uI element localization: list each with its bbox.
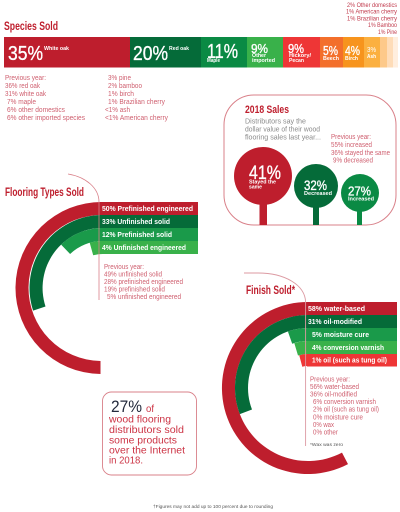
species previous year, column 2: <1% American cherry <box>105 115 168 122</box>
sales previous year: 55% increased <box>331 142 372 149</box>
species previous year, column 1: 6% other imported species <box>7 115 85 122</box>
species stacked bar: 9% <box>251 41 268 56</box>
species stacked bar: 5% <box>323 43 338 58</box>
chart: finish radial bars: 1% oil (such as tung oil) <box>312 358 387 364</box>
finish previous year <box>310 376 379 436</box>
chart: flooring types radial bars: 33% Unfinished solid <box>102 219 170 226</box>
flooring previous year <box>104 264 183 301</box>
lollipop: stayed the same 41%: Stayed the <box>249 180 276 186</box>
chart: finish radial bars: 5% moisture cure <box>312 332 369 339</box>
species previous year, column 1: 31% white oak <box>5 91 46 98</box>
chart: flooring types radial bars: 12% Prefinished solid <box>102 232 172 239</box>
footnote: rounding: †Figures may not add up to 100 percent due to rounding <box>153 504 273 510</box>
species stacked bar: 20% <box>133 43 168 65</box>
flooring previous year: 49% unfinished solid <box>104 272 162 278</box>
species stacked bar: White oak <box>44 46 70 52</box>
chart: finish radial bars: 4% conversion varnish <box>312 345 384 352</box>
lollipop: stayed the same 41%: same <box>249 184 262 190</box>
footnote: wax was zero: *Wax was zero <box>310 442 343 448</box>
heading: Species Sold: Species Sold <box>4 21 58 33</box>
flooring previous year: 5% unfinished engineered <box>107 294 181 301</box>
lollipop: decreased 32% <box>294 164 338 225</box>
sales intro text: dollar value of their wood <box>245 126 320 134</box>
sales intro text: Distributors say the <box>245 118 306 126</box>
callout: internet sales: over the Internet <box>109 444 185 456</box>
finish previous year: 0% moisture cure <box>313 414 363 422</box>
species stacked bar: 11% <box>207 41 238 63</box>
species previous year, column 2: 1% birch <box>108 91 134 98</box>
callout: internet sales <box>102 392 196 475</box>
chart: flooring types radial bars: 4% Unfinished engineered <box>102 245 186 252</box>
lollipop: decreased 32%: Decreased <box>304 191 332 197</box>
lollipop: increased 27%: Increased <box>348 196 374 202</box>
finish previous year: 0% wax <box>313 422 334 429</box>
species stacked bar <box>4 37 398 68</box>
species stacked bar: imported <box>252 58 275 64</box>
species previous year, column 2: 2% bamboo <box>108 83 142 90</box>
small species list, top right <box>346 2 398 36</box>
species stacked bar: Red oak <box>169 46 190 52</box>
flooring previous year: Previous year: <box>104 264 144 271</box>
sales previous year: Previous year: <box>331 134 371 141</box>
finish previous year: 56% water-based <box>310 384 359 391</box>
species previous year, column 1: 7% maple <box>7 99 36 106</box>
species stacked bar: Ash <box>367 54 376 60</box>
species stacked bar: 9% <box>288 41 304 56</box>
sales previous year: 9% decreased <box>333 158 373 164</box>
species stacked bar: 4% <box>345 43 360 58</box>
panel: 2018 Sales <box>224 95 396 225</box>
species stacked bar: Other <box>252 53 266 59</box>
lollipop: stayed the same 41%: 41% <box>249 163 281 184</box>
flooring previous year: 28% prefinished engineered <box>104 279 183 286</box>
species stacked bar: Hickory/ <box>289 53 312 59</box>
sales intro text <box>245 118 321 142</box>
species previous year, column 1: 6% other domestics <box>7 107 65 114</box>
lollipop: increased 27%: 27% <box>348 184 371 198</box>
chart: flooring types radial bars <box>15 174 198 374</box>
sales previous year: 36% stayed the same <box>331 150 390 157</box>
species previous year, column 2: <1% ash <box>105 107 130 114</box>
chart: finish radial bars <box>222 273 397 474</box>
species previous year, column 2: 1% Brazilian cherry <box>108 99 165 106</box>
callout: internet sales: wood flooring <box>108 414 171 426</box>
species stacked bar: Birch <box>345 56 358 62</box>
species previous year, column 1: Previous year: <box>5 75 46 82</box>
species stacked bar: Maple <box>207 58 220 64</box>
chart: finish radial bars: 58% water-based <box>308 306 365 313</box>
lollipop: decreased 32%: 32% <box>304 177 327 193</box>
chart: flooring types radial bars: 50% Prefinished engineered <box>102 206 193 213</box>
callout: internet sales: distributors sold <box>109 424 184 436</box>
species stacked bar: Beech <box>323 56 339 62</box>
callout: internet sales: some products <box>109 434 177 446</box>
finish previous year: Previous year: <box>310 376 350 384</box>
species stacked bar: 3% <box>367 47 376 54</box>
callout: internet sales: 27% <box>111 397 142 416</box>
heading: Flooring Types Sold: Flooring Types Sold <box>5 187 84 199</box>
species stacked bar: 35% <box>8 43 43 65</box>
chart: finish radial bars: 31% oil-modified <box>308 319 362 326</box>
callout: internet sales: of <box>146 404 154 415</box>
sales intro text: flooring sales last year... <box>245 134 321 142</box>
flooring previous year: 19% prefinished solid <box>104 286 165 294</box>
finish previous year: 6% conversion varnish <box>313 399 376 406</box>
finish previous year: 0% other <box>313 430 339 436</box>
species previous year, column 1: 36% red oak <box>5 83 40 90</box>
lollipop: increased 27% <box>341 174 379 225</box>
heading: 2018 Sales: 2018 Sales <box>245 104 289 116</box>
callout: internet sales: in 2018. <box>109 454 143 466</box>
species previous year, column 2 <box>105 75 168 122</box>
sales previous year <box>331 134 390 164</box>
species previous year, column 2: 3% pine <box>108 75 131 82</box>
species previous year, column 1 <box>5 75 85 122</box>
finish previous year: 36% oil-modified <box>310 392 357 398</box>
heading: Finish Sold: Finish Sold* <box>246 285 295 297</box>
species stacked bar: Pecan <box>289 58 304 64</box>
finish previous year: 2% oil (such as tung oil) <box>313 406 379 414</box>
lollipop: stayed the same 41% <box>234 147 292 225</box>
